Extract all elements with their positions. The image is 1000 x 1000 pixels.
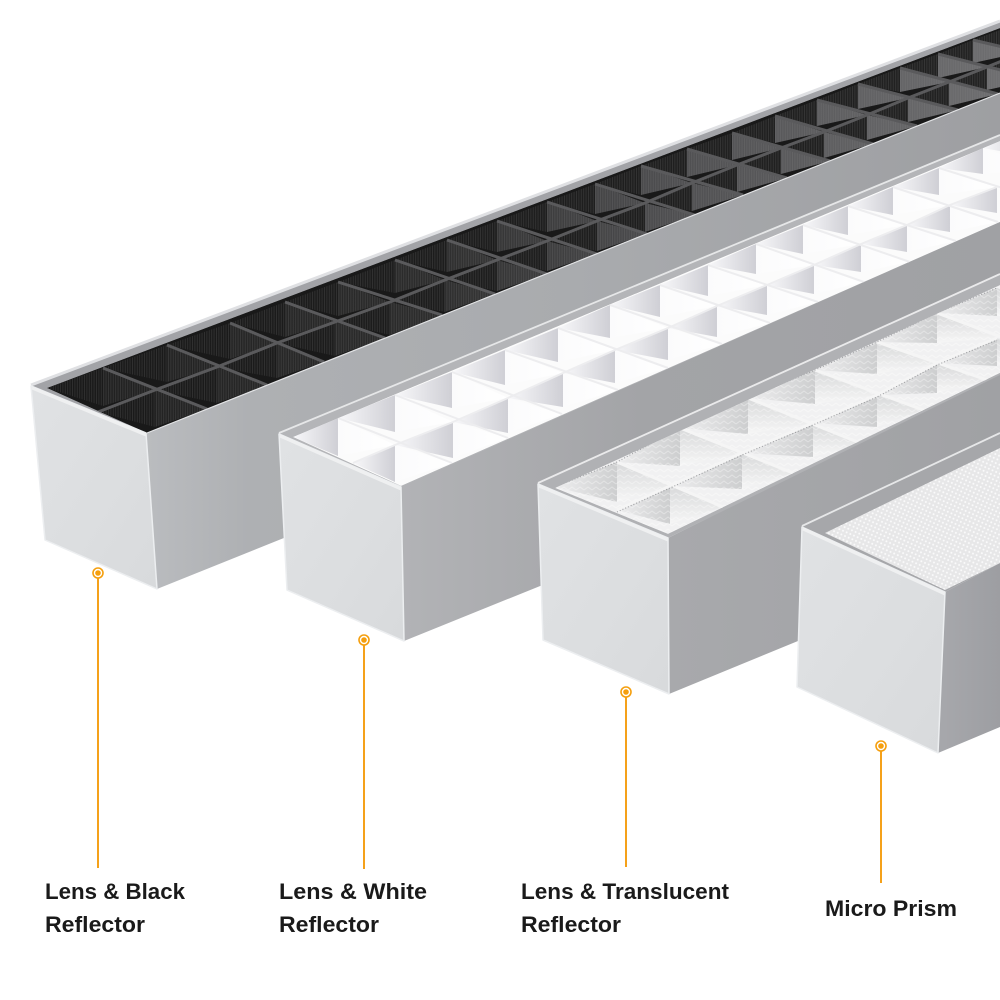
rim highlight <box>802 433 1000 526</box>
front end face <box>279 434 404 641</box>
callout line: lens and white reflector <box>359 635 369 869</box>
shaded cell faces <box>555 288 997 524</box>
inner wall and rim <box>279 136 1000 487</box>
label: micro prism: Micro Prism <box>825 896 957 921</box>
rim highlight <box>538 274 1000 483</box>
front end face <box>797 527 945 753</box>
label: lens and translucent reflector: Lens & Translucent <box>521 879 730 904</box>
micro prism diffuser <box>825 448 1000 590</box>
front top edge highlight <box>539 486 668 540</box>
inner wall and rim <box>538 274 1000 538</box>
fixture: micro prism <box>797 433 1000 753</box>
shaded cell faces <box>293 130 1000 482</box>
front top edge highlight <box>280 436 401 489</box>
inner wall and rim <box>31 22 1000 433</box>
callout line: lens and black reflector <box>93 568 103 868</box>
white reflector grid <box>293 130 1000 486</box>
front top edge highlight <box>803 529 945 594</box>
side face <box>401 222 1000 641</box>
front end face <box>31 386 157 589</box>
translucent reflector grid <box>555 285 1000 534</box>
callout line: lens and translucent reflector <box>621 687 631 867</box>
fixture: lens and translucent reflector <box>538 274 1000 694</box>
fixture: lens and black reflector <box>31 21 1000 589</box>
black reflector grid <box>47 27 1000 433</box>
side face <box>146 93 1000 589</box>
side face <box>668 373 1000 694</box>
rim highlight <box>279 135 1000 433</box>
label: lens and translucent reflector <box>521 879 730 937</box>
cell bars <box>617 313 1000 510</box>
front edge highlight <box>147 93 1000 433</box>
label: lens and black reflector: Reflector <box>45 912 145 937</box>
front end face <box>538 484 669 694</box>
label: lens and white reflector: Lens & White <box>279 879 427 904</box>
inner wall and rim <box>802 433 1000 592</box>
dotted cell edges <box>555 288 997 512</box>
label: lens and white reflector <box>279 879 427 937</box>
label: lens and black reflector: Lens & Black <box>45 879 186 904</box>
bright cell faces <box>338 148 1000 482</box>
front top edge highlight <box>32 388 146 435</box>
fixture: lens and white reflector <box>279 130 1000 641</box>
label: lens and black reflector <box>45 879 186 937</box>
bright cell faces <box>617 288 1000 524</box>
label: lens and white reflector: Reflector <box>279 912 379 937</box>
label: lens and translucent reflector: Reflector <box>521 912 621 937</box>
side face <box>938 563 1000 753</box>
rim highlight <box>31 21 1000 385</box>
callout line: micro prism <box>876 741 886 883</box>
